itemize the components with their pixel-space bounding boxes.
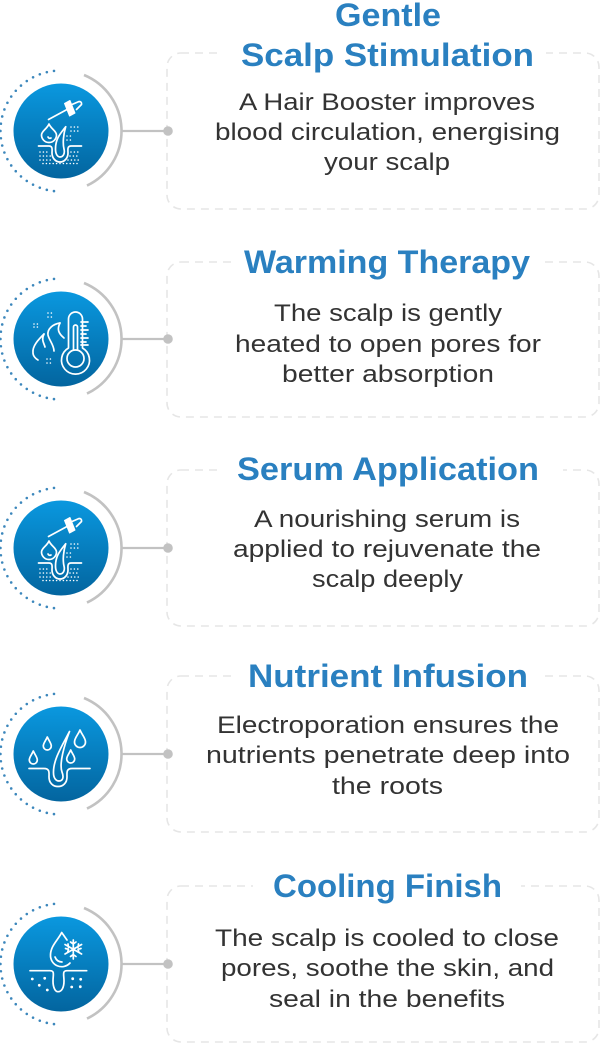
step 3: serum application [0, 451, 599, 626]
step 2: warming therapy [0, 244, 599, 417]
step 3 description: applied to rejuvenate the [233, 536, 541, 563]
step 2 heading: Warming Therapy [244, 244, 530, 280]
step 1 description [215, 89, 560, 176]
step 5 connector [122, 959, 173, 969]
step 4 description: Electroporation ensures the [217, 712, 559, 739]
step 4 card [167, 668, 599, 832]
step 1 heading [241, 0, 534, 73]
step 5 description: The scalp is cooled to close [215, 925, 559, 952]
step 3 description: A nourishing serum is [254, 506, 520, 533]
step 3 description [233, 506, 541, 593]
step 1 card [167, 45, 599, 209]
step 3 connector [122, 543, 173, 553]
step 2 description: heated to open pores for [235, 331, 541, 358]
step 4 icon: droplets around hair root [0, 694, 122, 814]
step 5: cooling finish [0, 868, 599, 1042]
step 1 description: A Hair Booster improves [239, 89, 535, 116]
step 5 heading: Cooling Finish [273, 868, 502, 904]
step 1: gentle scalp stimulation [0, 0, 599, 209]
step 4 description: the roots [332, 773, 443, 800]
step 3 icon: dropper over hair follicle [0, 488, 122, 608]
step 1 icon: dropper over hair follicle [0, 71, 122, 191]
step 4 heading: Nutrient Infusion [248, 658, 528, 694]
step 2 description [235, 300, 541, 388]
step 2 icon: thermometer and flames [0, 279, 122, 399]
step 1 connector [122, 126, 173, 136]
step 4 connector [122, 749, 173, 759]
step 1 description: blood circulation, energising [215, 119, 560, 146]
step 5 card [167, 878, 599, 1042]
step 3 card [167, 462, 599, 626]
step 2 card [167, 254, 599, 417]
step 4 description: nutrients penetrate deep into [206, 742, 570, 769]
step 2 description: The scalp is gently [274, 300, 502, 327]
step 4: nutrient infusion [0, 658, 599, 832]
step 1 heading: Scalp Stimulation [241, 37, 534, 73]
step 4 description [206, 712, 570, 800]
step 3 heading: Serum Application [237, 451, 539, 487]
step 2 description: better absorption [282, 361, 494, 388]
step 3 description: scalp deeply [312, 566, 463, 593]
step 5 description [215, 925, 559, 1013]
step 5 description: pores, soothe the skin, and [221, 955, 554, 982]
step 5 icon: droplet and snowflake [0, 904, 122, 1024]
step 1 description: your scalp [324, 149, 450, 176]
step 2 connector [122, 334, 173, 344]
step 5 description: seal in the benefits [269, 986, 505, 1013]
